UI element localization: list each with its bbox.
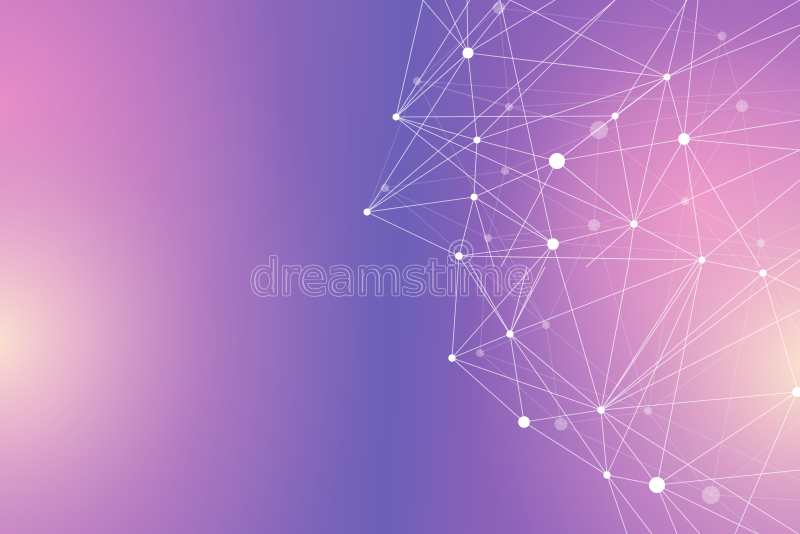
watermark: dreamstime — [250, 239, 533, 297]
network connection lines — [367, 0, 800, 534]
bright white nodes — [364, 48, 800, 493]
faint background network lines — [367, 0, 800, 534]
faint translucent nodes — [381, 2, 765, 504]
